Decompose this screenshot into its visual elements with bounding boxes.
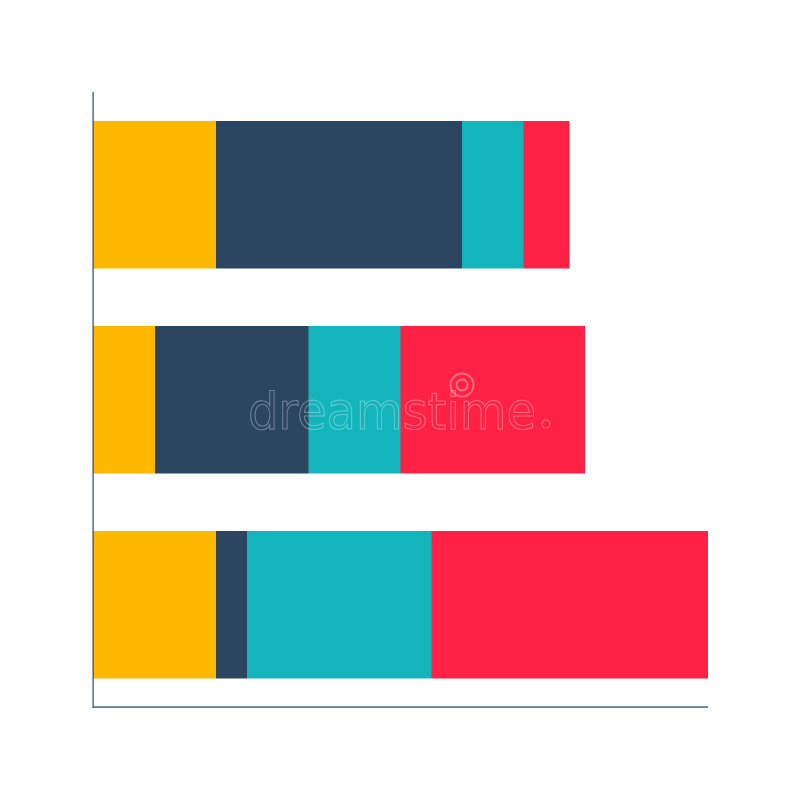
bar 1: [93, 121, 570, 268]
bar 3 segment: teal: [247, 531, 432, 678]
bar 3 segment: red: [432, 531, 708, 678]
watermark text: dreamstime: [248, 383, 536, 442]
watermark spiral logo: [450, 374, 474, 396]
bar 3: [93, 531, 708, 678]
bar 1 segment: yellow: [93, 121, 216, 268]
horizontal axis: [92, 706, 708, 708]
bar 3 segment: navy: [216, 531, 247, 678]
bar 3 segment: yellow: [93, 531, 216, 678]
bar 2 segment: yellow: [93, 326, 155, 474]
axes: [92, 92, 708, 708]
watermark registered mark: [542, 420, 550, 428]
bar 2 segment: red: [400, 326, 585, 474]
watermark: [248, 374, 550, 442]
bar 1 segment: red: [524, 121, 570, 268]
bar 1 segment: teal: [462, 121, 524, 268]
bar 2 segment: teal: [308, 326, 400, 474]
bar 1 segment: navy: [216, 121, 462, 268]
vertical axis: [92, 92, 94, 708]
bar 2: [93, 326, 585, 474]
bar 2 segment: navy: [155, 326, 308, 474]
